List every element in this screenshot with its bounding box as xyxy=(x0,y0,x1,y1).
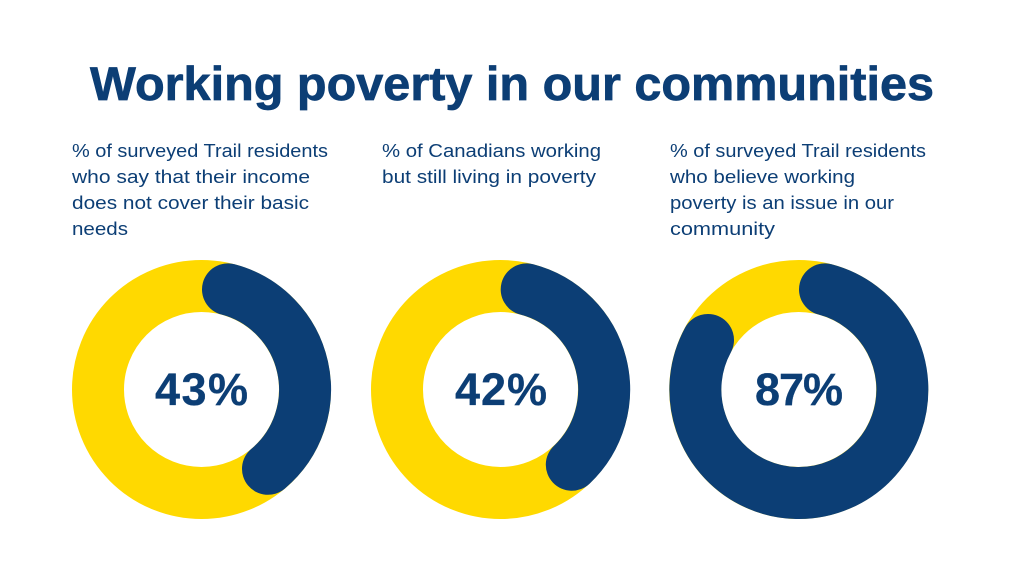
description: Trail residents belief: community xyxy=(670,218,776,239)
description: Trail residents belief: % of surveyed Trail residents xyxy=(670,140,926,161)
description: Trail residents income: who say that their income xyxy=(71,166,310,187)
donut chart: 87% xyxy=(695,286,902,493)
description: Trail residents income: % of surveyed Trail residents xyxy=(72,140,328,161)
description: Trail residents income: needs xyxy=(72,218,128,239)
donut chart: 42% xyxy=(397,286,604,493)
description: Canadians working xyxy=(382,140,601,187)
description: Trail residents belief xyxy=(669,140,926,239)
donut chart: 42%: 42% xyxy=(455,364,547,415)
description: Trail residents income xyxy=(71,140,328,239)
description: Trail residents belief: who believe working xyxy=(669,166,855,187)
description: Trail residents income: does not cover their basic xyxy=(72,192,309,213)
description: Canadians working: % of Canadians working xyxy=(382,140,601,161)
donut chart: 87%: 87% xyxy=(755,364,843,415)
title: Working poverty in our communities xyxy=(90,57,934,110)
description: Canadians working: but still living in poverty xyxy=(382,166,597,187)
donut chart: 43%: 43% xyxy=(155,364,248,415)
donut chart: 43% xyxy=(98,286,305,493)
description: Trail residents belief: poverty is an issue in our xyxy=(670,192,894,213)
